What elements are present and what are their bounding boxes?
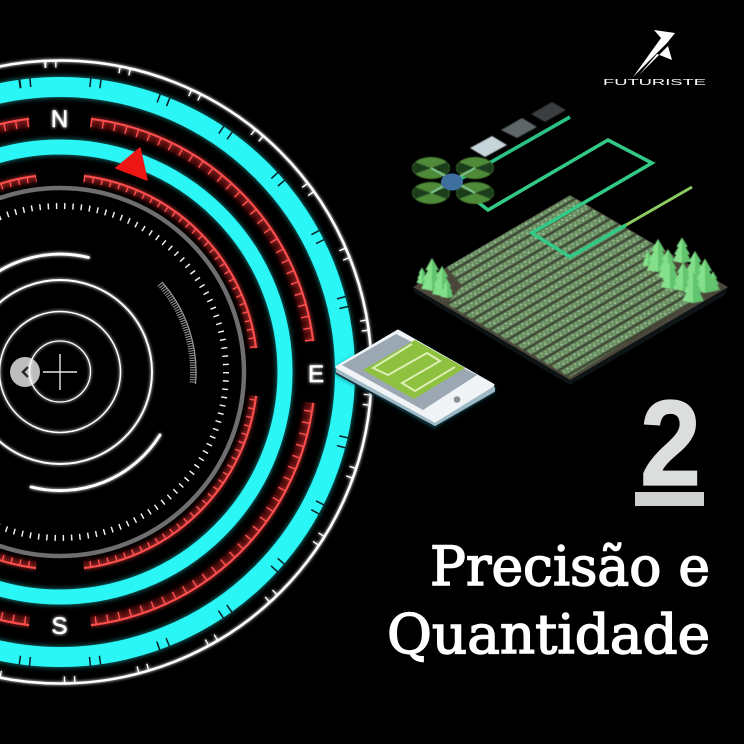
heading — [387, 535, 710, 666]
drone body — [441, 174, 463, 190]
drone arms — [431, 168, 475, 193]
carousel arrow button — [10, 357, 40, 387]
red pointer triangle — [116, 148, 147, 180]
compass dial — [0, 43, 389, 701]
rotor bottom left — [412, 182, 450, 204]
isometric field — [413, 195, 728, 385]
tablet — [337, 331, 494, 427]
outer white ring — [0, 49, 383, 695]
field ground — [413, 195, 728, 380]
compass letter E: E — [308, 361, 324, 388]
tablet screen — [342, 334, 477, 410]
drone flight path — [456, 117, 692, 257]
heading: Quantidade — [387, 603, 710, 666]
tablet home button — [454, 396, 460, 403]
red scale arcs — [0, 114, 318, 630]
heading: Precisão e — [430, 535, 710, 598]
logo arrow — [633, 30, 675, 77]
outer cyan ring — [0, 43, 389, 701]
rotors — [412, 157, 494, 204]
logo wordmark: FUTURISTE — [603, 78, 706, 87]
tablet field map — [363, 340, 465, 399]
compass letter N: N — [51, 106, 68, 133]
logo — [603, 30, 706, 87]
field base — [413, 195, 728, 385]
rotor bottom right — [456, 182, 494, 204]
white tick ring — [0, 206, 226, 538]
rotor top left — [412, 157, 450, 179]
left tree cluster — [416, 258, 453, 298]
gray ring — [0, 188, 244, 556]
rotor top right — [456, 157, 494, 179]
drone — [412, 157, 494, 204]
gray tick arc — [160, 282, 196, 384]
inner cyan ring — [0, 147, 285, 597]
survey images — [470, 102, 566, 157]
number 2: 2 — [640, 375, 701, 511]
compass letter S: S — [51, 613, 68, 640]
white arcs — [0, 254, 160, 491]
crop rows — [447, 196, 692, 377]
concentric circles — [0, 280, 152, 464]
center crosshair — [43, 354, 77, 390]
right tree cluster — [642, 238, 720, 303]
